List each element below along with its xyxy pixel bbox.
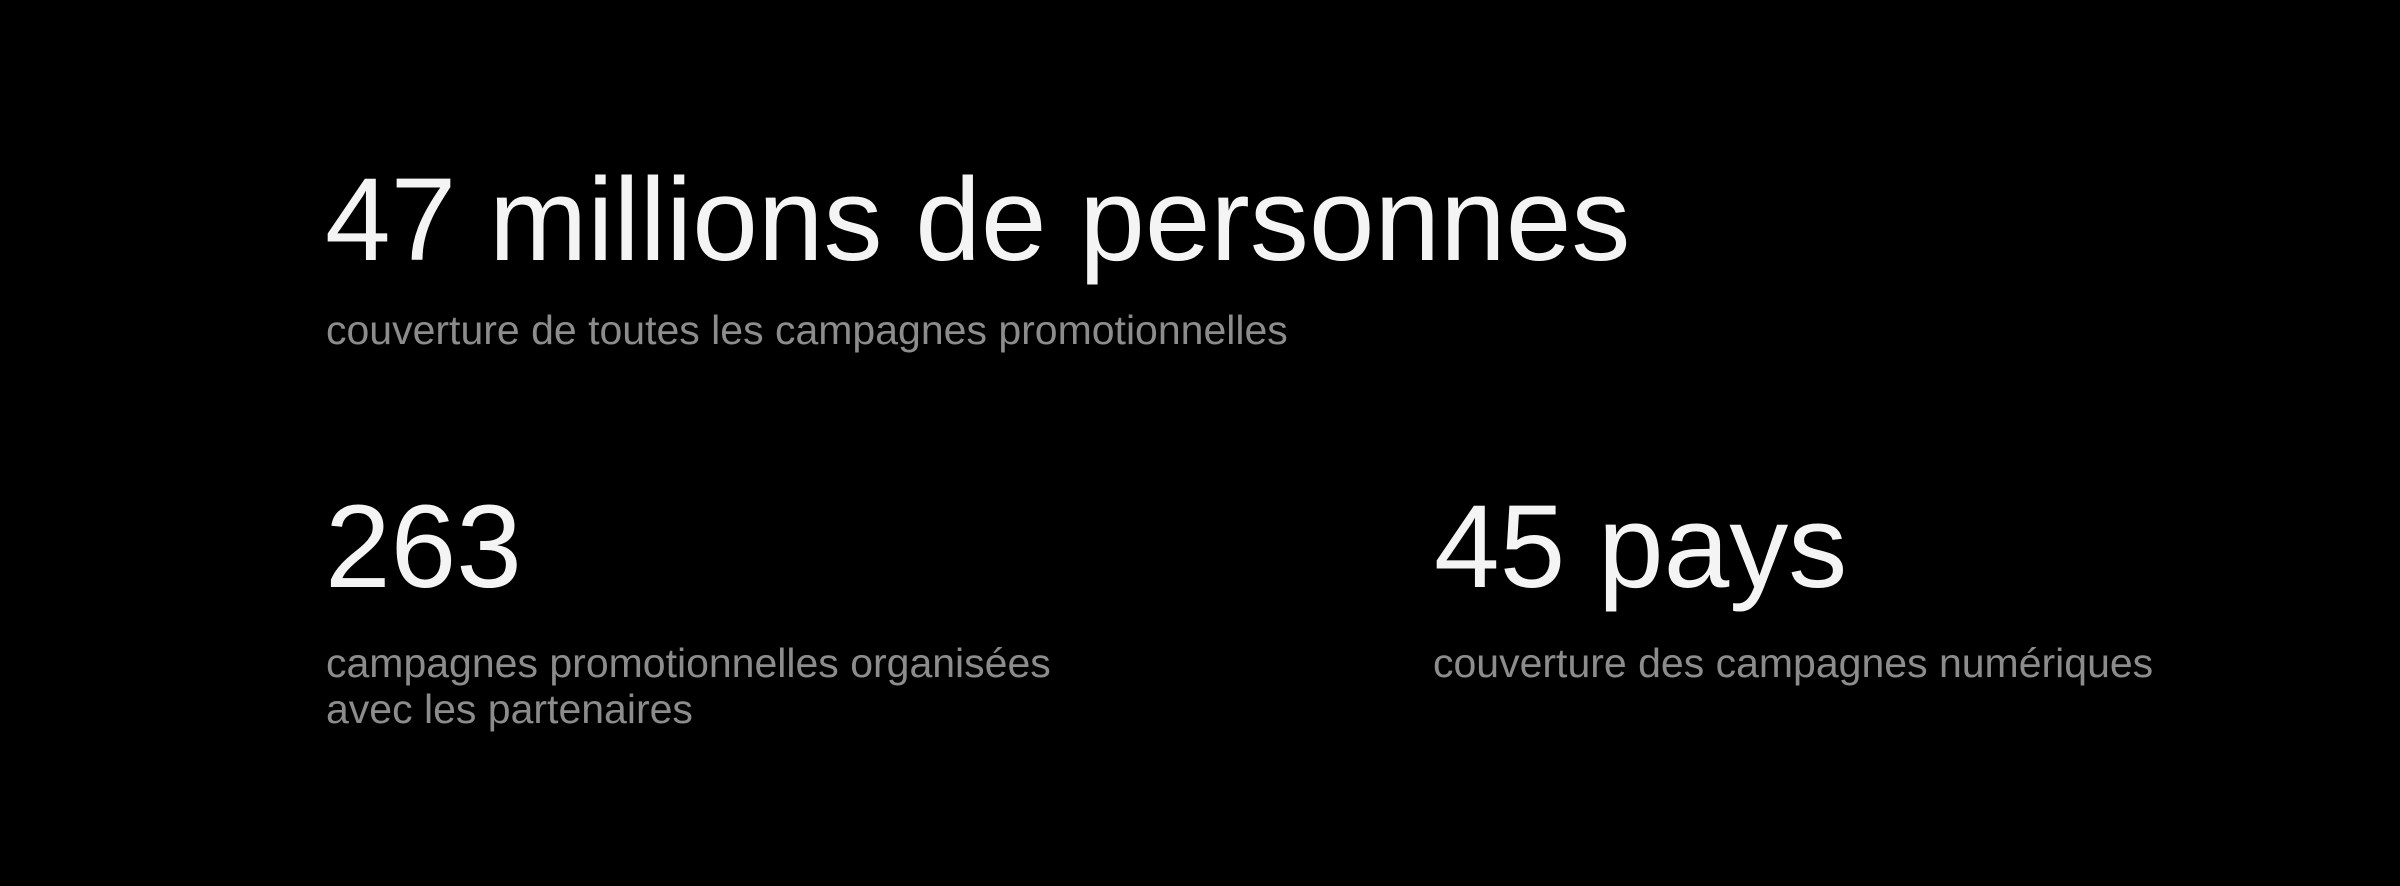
text: campaigns with partners: campagnes promotionnelles organisées <box>326 640 1051 686</box>
text: campaigns with partners: avec les partenaires <box>326 686 693 732</box>
heading: 45 pays: 45 pays <box>1434 481 1847 613</box>
heading: 47 millions de personnes: 47 millions de personnes <box>325 154 1630 286</box>
heading: 263: 263 <box>325 481 522 613</box>
text: campaigns with partners <box>326 640 1051 732</box>
text: digital campaigns coverage: couverture des campagnes numériques <box>1433 640 2153 686</box>
text: reach of promotional campaigns: couverture de toutes les campagnes promotionnelles <box>326 307 1288 353</box>
